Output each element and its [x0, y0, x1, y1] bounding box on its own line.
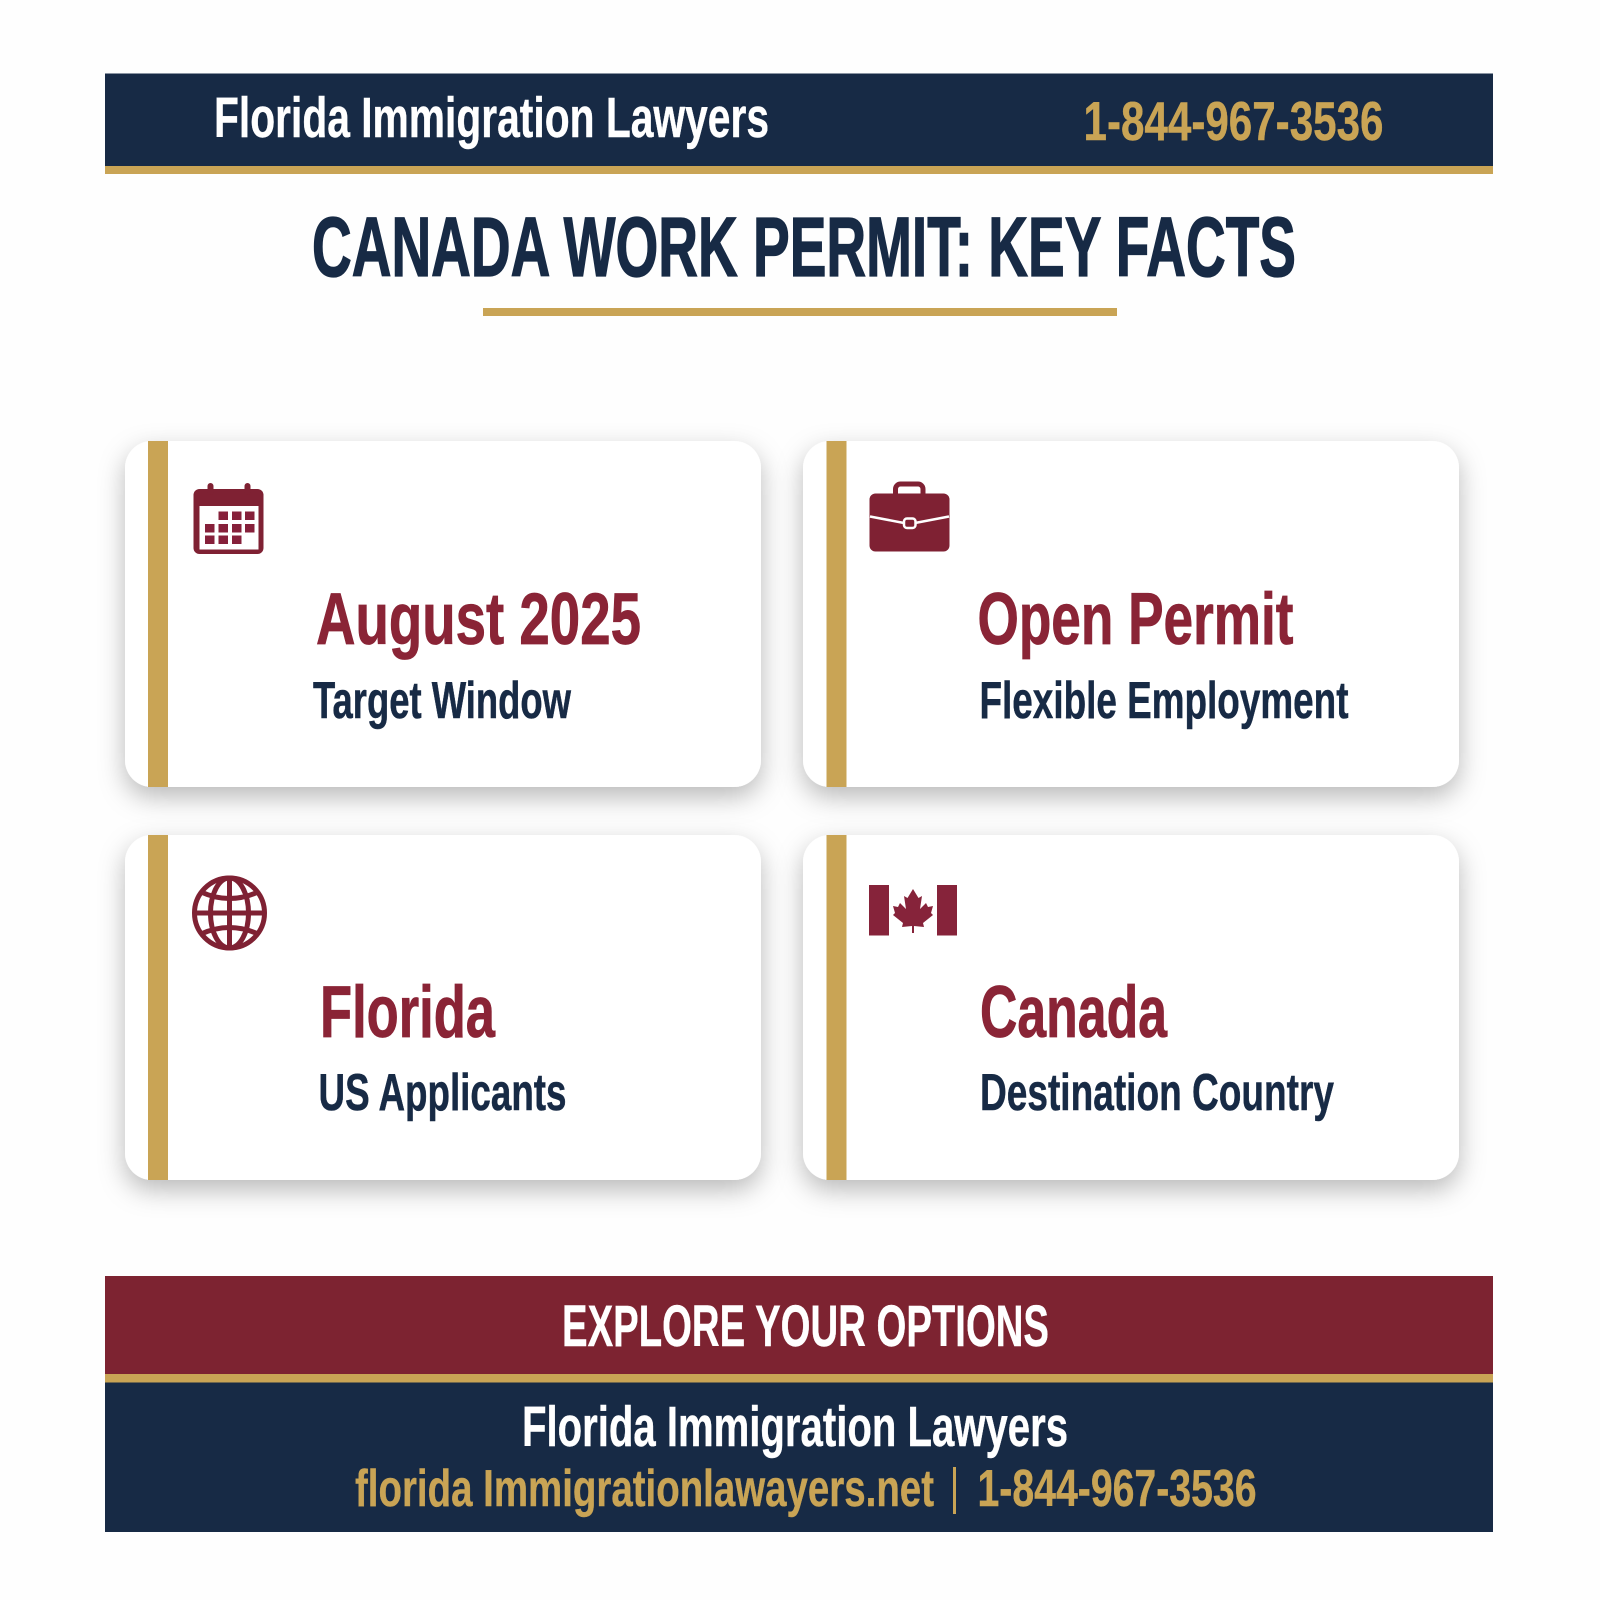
icon: briefcase	[870, 484, 950, 552]
fact label: Flexible Employment	[980, 672, 1348, 730]
header firm name: Florida Immigration Lawyers	[214, 86, 769, 150]
panel: August 2025	[125, 441, 761, 787]
footer call-to-action band	[105, 1276, 1493, 1374]
panel: Open Permit	[803, 441, 1459, 787]
icon: calendar	[194, 483, 264, 554]
fact heading: Florida	[320, 972, 496, 1053]
CTA heading: EXPLORE YOUR OPTIONS	[562, 1294, 1049, 1359]
fact label: US Applicants	[318, 1064, 566, 1122]
fact label: Destination Country	[980, 1064, 1334, 1122]
footer contact band	[105, 1382, 1493, 1532]
header phone number: 1-844-967-3536	[1084, 90, 1384, 152]
header bar	[105, 74, 1493, 174]
panel: Canada	[803, 835, 1459, 1180]
fact heading: August 2025	[316, 579, 641, 660]
fact heading: Open Permit	[978, 579, 1294, 660]
footer firm name: Florida Immigration Lawyers	[522, 1395, 1068, 1459]
footer website: florida Immigrationlawayers.net	[355, 1460, 934, 1518]
footer gold rule	[105, 1374, 1493, 1382]
fact heading: Canada	[980, 972, 1168, 1053]
icon: globe	[194, 878, 264, 948]
fact label: Target Window	[313, 672, 571, 730]
footer divider	[953, 1467, 956, 1514]
title underline	[483, 308, 1117, 316]
footer phone number: 1-844-967-3536	[978, 1460, 1256, 1518]
panel: Florida	[125, 835, 761, 1180]
icon: Canadian flag	[869, 885, 957, 936]
